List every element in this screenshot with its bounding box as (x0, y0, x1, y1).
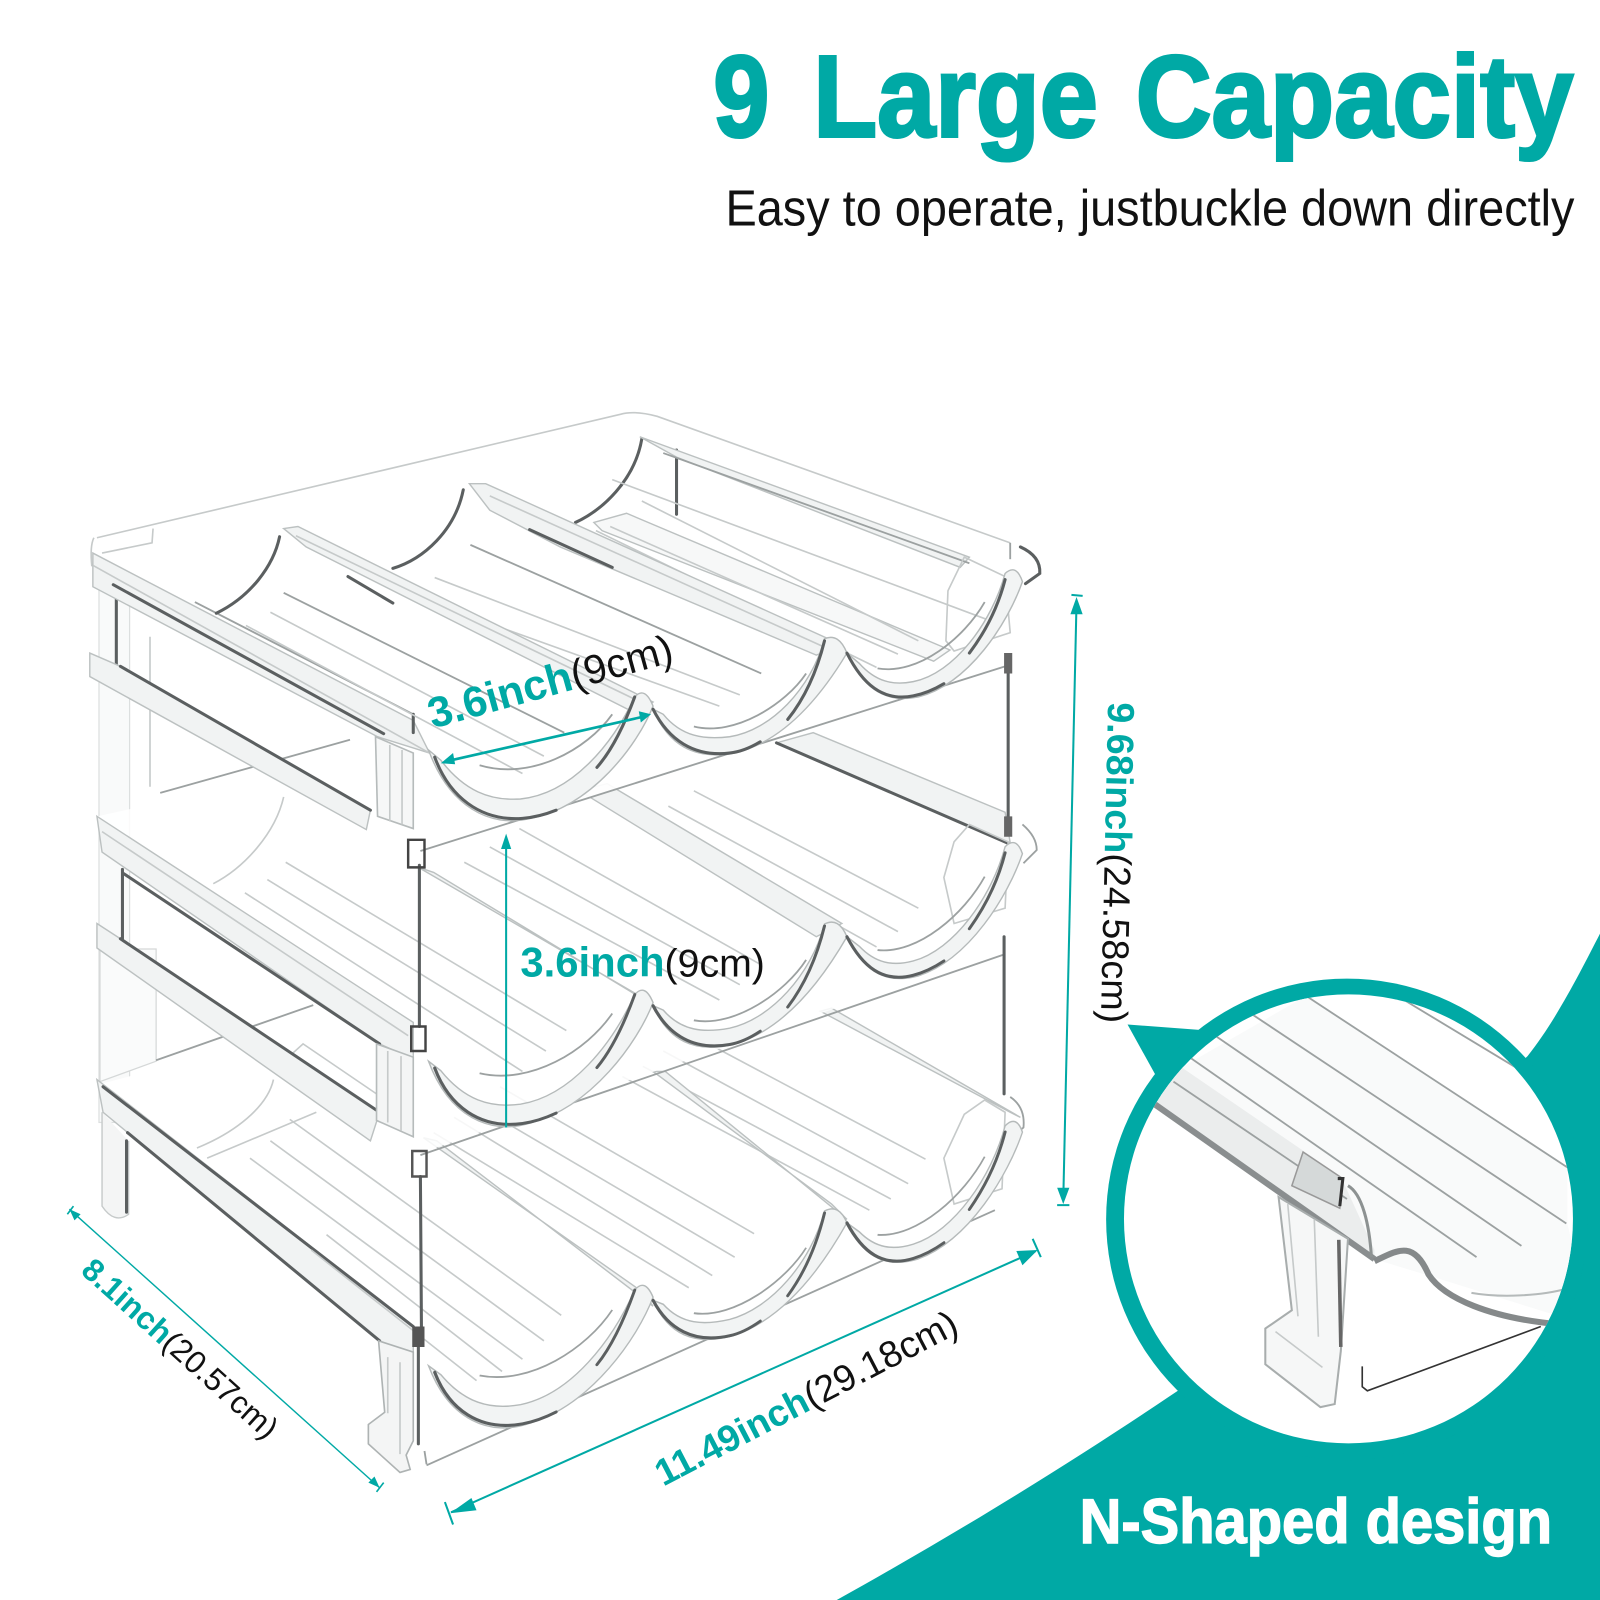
shelf 3 (bottom) (97, 959, 1024, 1472)
title: Large (813, 32, 1098, 162)
title (713, 32, 1574, 162)
inset detail: foot close-up (1124, 994, 1592, 1443)
inset caption: N-Shaped design (1080, 1487, 1552, 1557)
callout pointer (1128, 1024, 1209, 1082)
dimension: shelf gap height (501, 834, 765, 1128)
slats (250, 1031, 926, 1381)
slats (245, 791, 918, 1071)
dimension: total height (1057, 595, 1142, 1205)
ridges (284, 480, 995, 714)
shelf 1 (top) (90, 413, 1040, 867)
dimension: bottle slot width: 3.6inch(9cm) (422, 625, 678, 738)
title: 9 (713, 32, 769, 162)
dimension: width: 11.49inch(29.18cm) (648, 1302, 964, 1494)
dimension: total height: 9.68inch (24.58cm) (1093, 702, 1142, 1024)
dimension: depth (67, 1206, 384, 1492)
shelf 2 (middle) (97, 704, 1037, 1177)
slats (246, 501, 918, 773)
dimension: depth: 8.1inch(20.57cm) (75, 1251, 286, 1446)
wine rack illustration (90, 413, 1040, 1472)
dimension: shelf gap height: 3.6inch(9cm) (520, 939, 765, 986)
teal corner background (837, 934, 1600, 1600)
dimension: width (445, 1239, 1041, 1524)
back posts (99, 582, 350, 1218)
inset ring (1106, 979, 1588, 1460)
